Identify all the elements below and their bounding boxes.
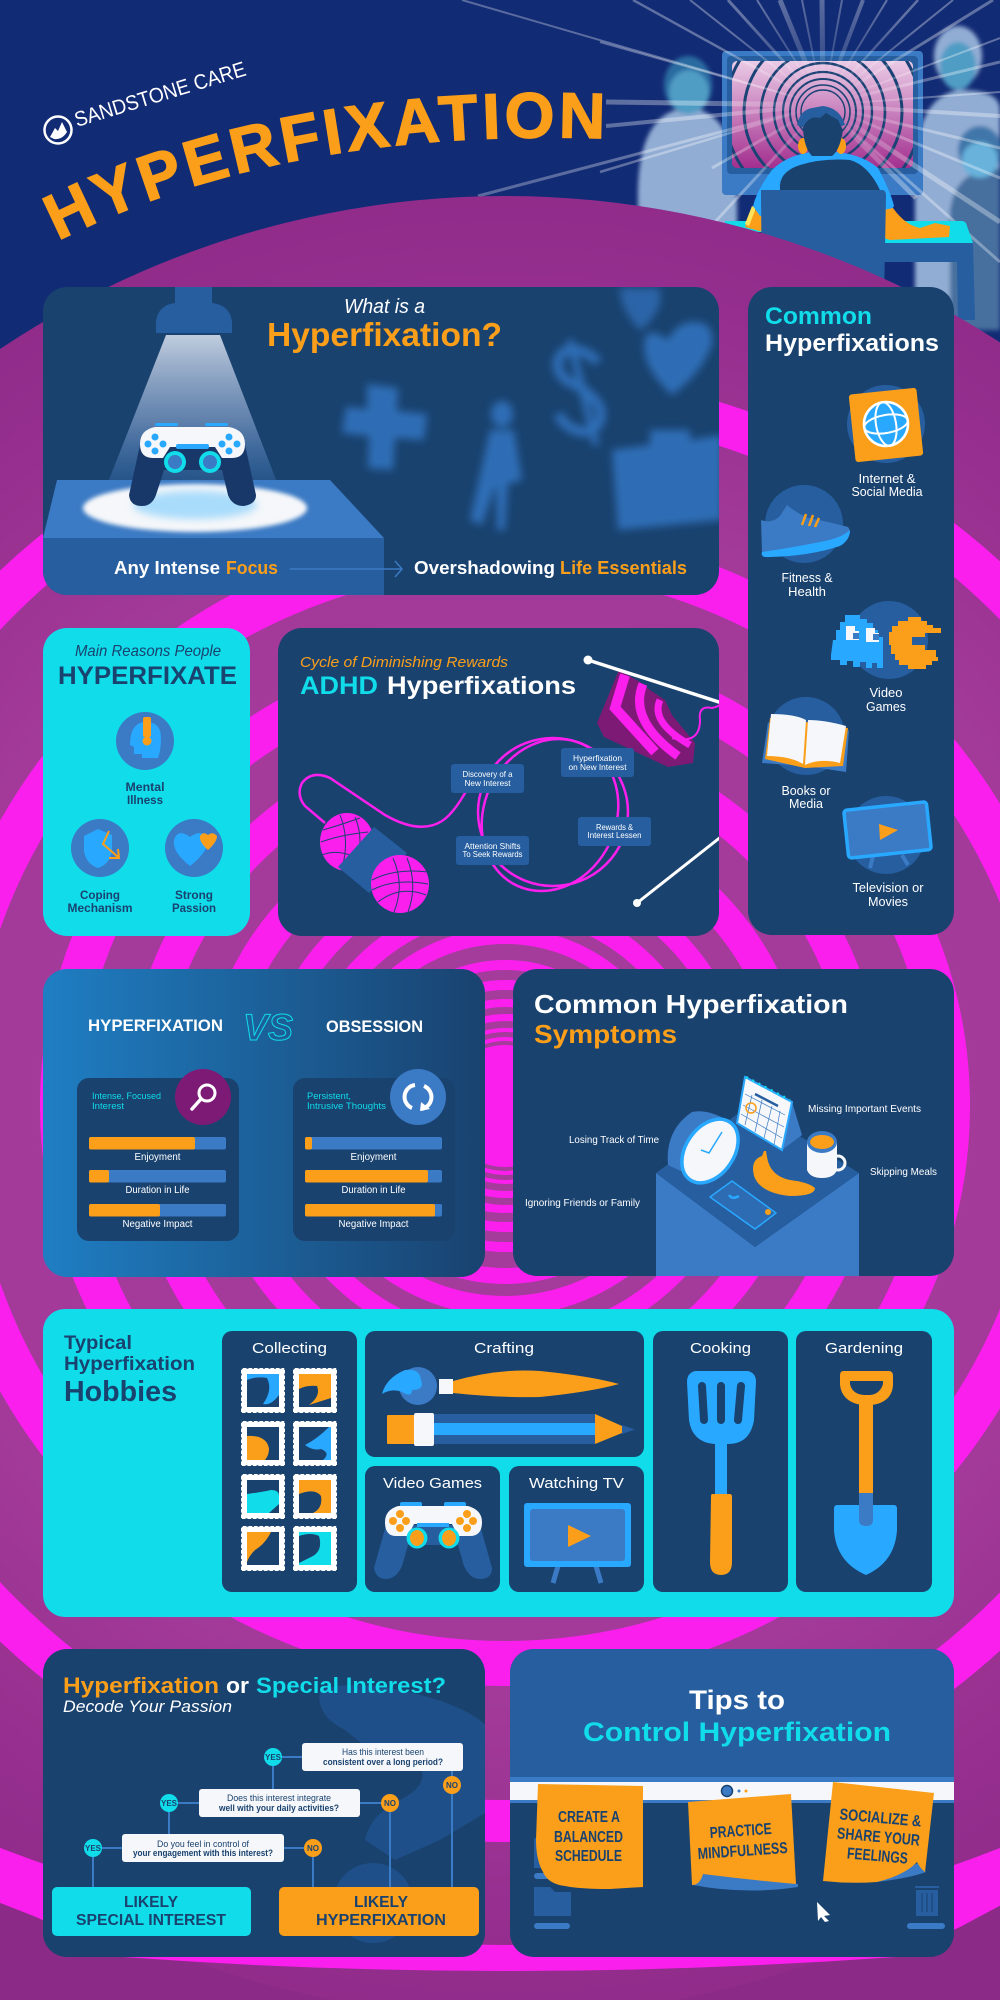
heading: OBSESSION xyxy=(326,1017,423,1036)
stamp 4 xyxy=(293,1421,337,1466)
icon: calendar xyxy=(737,1077,802,1150)
icon: television xyxy=(844,796,931,874)
heading: Typical xyxy=(64,1333,132,1354)
card: gardening xyxy=(796,1331,932,1592)
bar: duration xyxy=(305,1170,442,1196)
card: obsession: Persistent, xyxy=(307,1091,351,1102)
heading xyxy=(64,1333,195,1408)
card: crafting xyxy=(365,1331,644,1457)
card: cooking xyxy=(653,1331,788,1592)
stamp 1 xyxy=(241,1368,285,1413)
label: fitness: Health xyxy=(788,585,826,599)
bar: negative impact: Negative Impact xyxy=(338,1219,409,1230)
bar: enjoyment: Enjoyment xyxy=(134,1152,181,1163)
label: strong passion: Passion xyxy=(172,901,216,915)
heading: HYPERFIXATION xyxy=(88,1016,223,1035)
icon: running shoe xyxy=(761,485,850,563)
question 3 xyxy=(122,1834,284,1862)
sticky note: socialize xyxy=(823,1782,934,1883)
question 1: consistent over a long period? xyxy=(323,1757,443,1768)
heading: Hyperfixations xyxy=(387,672,576,700)
desk xyxy=(725,221,975,320)
label: television: Movies xyxy=(868,895,908,909)
heading xyxy=(267,296,502,353)
icon: banana xyxy=(753,1151,815,1196)
heading: Symptoms xyxy=(534,1019,677,1049)
icon: phone xyxy=(710,1181,776,1229)
caption: any intense focus to overshadowing life essentials: Any Intense xyxy=(114,558,220,578)
cycle step: attention shifts: Attention Shifts xyxy=(464,841,520,851)
card: obsession: Intrusive Thoughts xyxy=(307,1101,386,1112)
heading: Hyperfixation? xyxy=(267,316,502,353)
panel: main reasons people hyperfixate xyxy=(43,628,250,936)
label: coping mechanism: Mechanism xyxy=(68,901,132,915)
question 3: your engagement with this interest? xyxy=(133,1848,273,1859)
symptom labels: Losing Track of Time xyxy=(569,1134,659,1146)
label: coping mechanism xyxy=(68,888,132,915)
heading: Control Hyperfixation xyxy=(583,1717,891,1747)
heading xyxy=(583,1685,891,1747)
sticky note: balanced schedule: CREATE A xyxy=(558,1809,620,1826)
question 1: Has this interest been xyxy=(342,1747,424,1758)
sticky note: balanced schedule: BALANCED xyxy=(554,1829,623,1846)
bar: enjoyment xyxy=(89,1137,226,1163)
person xyxy=(745,106,950,300)
label: video games: Video xyxy=(870,686,903,700)
icon: spatula xyxy=(687,1371,756,1575)
yes and no badges: YES xyxy=(161,1799,178,1808)
blurred onlookers xyxy=(638,26,1000,330)
yes and no badges: NO xyxy=(384,1799,396,1808)
sticky note: socialize: SHARE YOUR xyxy=(836,1825,921,1850)
heading: Hobbies xyxy=(64,1376,177,1408)
yarn balls xyxy=(320,813,429,913)
card: gardening: Gardening xyxy=(825,1340,903,1357)
question 2: Does this interest integrate xyxy=(227,1793,331,1804)
label: books: Books or xyxy=(782,784,830,798)
cycle step: discovery xyxy=(451,764,524,793)
background: navy sky xyxy=(0,0,1000,1200)
yes and no badges: NO xyxy=(446,1781,458,1790)
stamp 2 xyxy=(293,1368,337,1413)
cycle step: hyperfixation: on New Interest xyxy=(568,762,627,772)
label: fitness xyxy=(782,571,833,599)
label: books: Media xyxy=(789,797,823,811)
label: mental illness: Mental xyxy=(126,780,164,794)
panel: common hyperfixations xyxy=(748,287,954,935)
cycle step: attention shifts: To Seek Rewards xyxy=(462,849,522,859)
caption: any intense focus to overshadowing life essentials: Focus xyxy=(226,558,278,578)
yarn thread and cycle loop xyxy=(300,716,643,914)
cycle step: discovery: New Interest xyxy=(464,778,511,788)
cycle step: hyperfixation: Hyperfixation xyxy=(573,753,622,763)
label: video games xyxy=(866,686,906,714)
label: video games: Games xyxy=(866,700,906,714)
card: crafting: Crafting xyxy=(474,1340,534,1357)
heading: Main Reasons People xyxy=(75,643,221,660)
label: internet: Internet & xyxy=(858,472,916,486)
light rays xyxy=(462,0,1000,262)
icon: television xyxy=(524,1503,631,1583)
heading xyxy=(88,1007,423,1048)
bar: duration: Duration in Life xyxy=(342,1185,406,1196)
heading: ADHD xyxy=(300,672,378,700)
stamp 6 xyxy=(293,1474,337,1519)
symptom labels: Ignoring Friends or Family xyxy=(525,1197,641,1209)
symptom labels xyxy=(525,1103,937,1209)
card: cooking: Cooking xyxy=(690,1340,751,1357)
blurred life-essentials icons xyxy=(342,288,722,530)
result: likely hyperfixation: LIKELY xyxy=(354,1894,408,1911)
label: mental illness xyxy=(126,780,164,807)
panel: typical hyperfixation hobbies xyxy=(43,1309,954,1617)
bar: negative impact xyxy=(89,1204,226,1230)
stamp 8 xyxy=(293,1526,337,1571)
card: watching tv xyxy=(509,1466,644,1592)
heading: Common xyxy=(765,303,872,330)
spotlight cone xyxy=(109,335,276,480)
toolbar dots xyxy=(722,1786,748,1796)
heading: or xyxy=(226,1673,249,1698)
heading: Hyperfixations xyxy=(765,330,939,357)
panel: what is a hyperfixation xyxy=(43,287,722,598)
game controller on platform xyxy=(129,423,256,506)
sticky note: balanced schedule xyxy=(536,1784,643,1889)
cycle step: hyperfixation xyxy=(561,748,634,777)
panel: common hyperfixation symptoms xyxy=(513,969,954,1280)
icon: game controller xyxy=(374,1502,492,1579)
sticky note: practice mindfulness: MINDFULNESS xyxy=(697,1840,788,1863)
cycle step: discovery: Discovery of a xyxy=(462,769,513,779)
caption: any intense focus to overshadowing life essentials xyxy=(114,558,687,578)
yes and no badges: NO xyxy=(307,1844,319,1853)
card: video games xyxy=(365,1466,500,1592)
sticky note: practice mindfulness: PRACTICE xyxy=(709,1821,772,1842)
lamp xyxy=(156,287,232,333)
sticky note: socialize: SOCIALIZE & xyxy=(839,1806,922,1831)
panel: ADHD hyperfixations cycle xyxy=(278,628,722,936)
sticky note: socialize: FEELINGS xyxy=(846,1845,909,1868)
card: video games: Video Games xyxy=(383,1475,482,1492)
panel: hyperfixation vs obsession xyxy=(43,969,485,1277)
icon: clock xyxy=(668,1109,750,1193)
card: hyperfixation xyxy=(77,1069,239,1241)
heading: Hyperfixation xyxy=(64,1354,195,1375)
stamp 5 xyxy=(241,1474,285,1519)
heading xyxy=(58,643,237,690)
heading: Decode Your Passion xyxy=(63,1697,232,1716)
question 1 xyxy=(302,1743,463,1771)
sticky note: practice mindfulness xyxy=(688,1794,798,1891)
icon: internet globe xyxy=(847,385,925,463)
symptom labels: Missing Important Events xyxy=(808,1103,921,1115)
icon: coping mechanism xyxy=(71,819,129,877)
label: strong passion: Strong xyxy=(175,888,213,902)
logo: Sandstone Care xyxy=(44,58,249,143)
platform xyxy=(43,480,384,598)
heading: Tips to xyxy=(689,1685,785,1715)
caption: any intense focus to overshadowing life essentials: Overshadowing xyxy=(414,558,555,578)
question 3: Do you feel in control of xyxy=(157,1839,249,1850)
stamp 7 xyxy=(241,1526,285,1571)
sticky note: balanced schedule: SCHEDULE xyxy=(555,1848,622,1865)
card: hyperfixation: Intense, Focused xyxy=(92,1091,161,1102)
card: hyperfixation: Interest xyxy=(92,1101,124,1112)
label: coping mechanism: Coping xyxy=(80,888,120,902)
heading xyxy=(765,303,939,357)
isometric table xyxy=(656,1105,859,1280)
cycle step: rewards lessen: Interest Lessen xyxy=(588,830,642,840)
label: internet: Social Media xyxy=(852,485,923,499)
bar: negative impact xyxy=(305,1204,442,1230)
card: collecting stamps xyxy=(222,1331,357,1592)
bar: duration xyxy=(89,1170,226,1196)
yes and no badges xyxy=(84,1748,461,1857)
heading xyxy=(534,989,848,1049)
icon: strong passion xyxy=(165,819,223,877)
label: television xyxy=(852,881,924,909)
mouse cursor xyxy=(817,1902,830,1922)
stamp 3 xyxy=(241,1421,285,1466)
heading: Hyperfixation xyxy=(63,1673,219,1698)
icon: shovel xyxy=(834,1371,897,1575)
result: likely hyperfixation: HYPERFIXATION xyxy=(316,1912,446,1929)
cycle step: rewards lessen: Rewards & xyxy=(596,822,633,832)
label: mental illness: Illness xyxy=(127,793,163,807)
question 2: well with your daily activities? xyxy=(218,1803,339,1814)
bar: enjoyment xyxy=(305,1137,442,1163)
heading xyxy=(63,1673,446,1716)
panel: tips to control hyperfixation xyxy=(510,1649,954,1957)
knitting needles and sock xyxy=(584,656,722,907)
background: lower purple field xyxy=(0,1200,1000,2000)
heading: HYPERFIXATE xyxy=(58,662,237,690)
result: likely hyperfixation xyxy=(279,1887,479,1936)
icon: arcade ghost and pacman xyxy=(831,601,941,679)
heading: Common Hyperfixation xyxy=(534,989,848,1019)
bar: duration: Duration in Life xyxy=(126,1185,190,1196)
caption: any intense focus to overshadowing life essentials: Life Essentials xyxy=(560,558,687,578)
panel: hyperfixation or special interest flowchart xyxy=(43,1649,490,1957)
heading xyxy=(300,654,576,700)
symptom labels: Skipping Meals xyxy=(870,1166,937,1178)
icon: paint brush xyxy=(382,1367,619,1405)
question 2 xyxy=(199,1789,360,1817)
yes and no badges: YES xyxy=(85,1844,102,1853)
label: books xyxy=(782,784,830,811)
monitor xyxy=(722,51,923,195)
decorative question mark blob xyxy=(319,1685,490,1943)
icon: mental illness xyxy=(116,712,174,770)
title: HYPERFIXATION xyxy=(42,92,602,240)
hero illustration: person at hypnotic monitor xyxy=(462,0,1000,330)
cycle step: rewards lessen xyxy=(578,817,651,846)
bar: negative impact: Negative Impact xyxy=(122,1219,193,1230)
result: likely special interest: LIKELY xyxy=(124,1894,178,1911)
flow connector lines xyxy=(93,1757,452,1887)
label: strong passion xyxy=(172,888,216,915)
icon: cycle arrows xyxy=(390,1069,446,1125)
yes and no badges: YES xyxy=(265,1753,282,1762)
heading: Special Interest? xyxy=(256,1673,446,1698)
icon: open book xyxy=(762,697,849,775)
label: fitness: Fitness & xyxy=(782,571,833,585)
heading: Cycle of Diminishing Rewards xyxy=(300,654,509,671)
label: television: Television or xyxy=(852,881,924,895)
logo: Sandstone Care: SANDSTONE CARE xyxy=(72,58,249,132)
result: likely special interest: SPECIAL INTEREST xyxy=(76,1912,226,1929)
result: likely special interest xyxy=(52,1887,251,1936)
icon: mug xyxy=(807,1131,845,1178)
heading: What is a xyxy=(344,296,425,318)
card: obsession xyxy=(293,1069,455,1241)
bar: enjoyment: Enjoyment xyxy=(350,1152,397,1163)
card: watching tv: Watching TV xyxy=(529,1475,624,1492)
card: collecting stamps: Collecting xyxy=(252,1340,327,1357)
label: internet xyxy=(852,472,923,499)
desktop icons: folders and trash xyxy=(534,1838,945,1929)
cycle step: attention shifts xyxy=(456,836,529,865)
heading: VS xyxy=(243,1007,293,1048)
icon: pencil xyxy=(387,1413,635,1446)
icon: magnifier xyxy=(175,1069,231,1125)
